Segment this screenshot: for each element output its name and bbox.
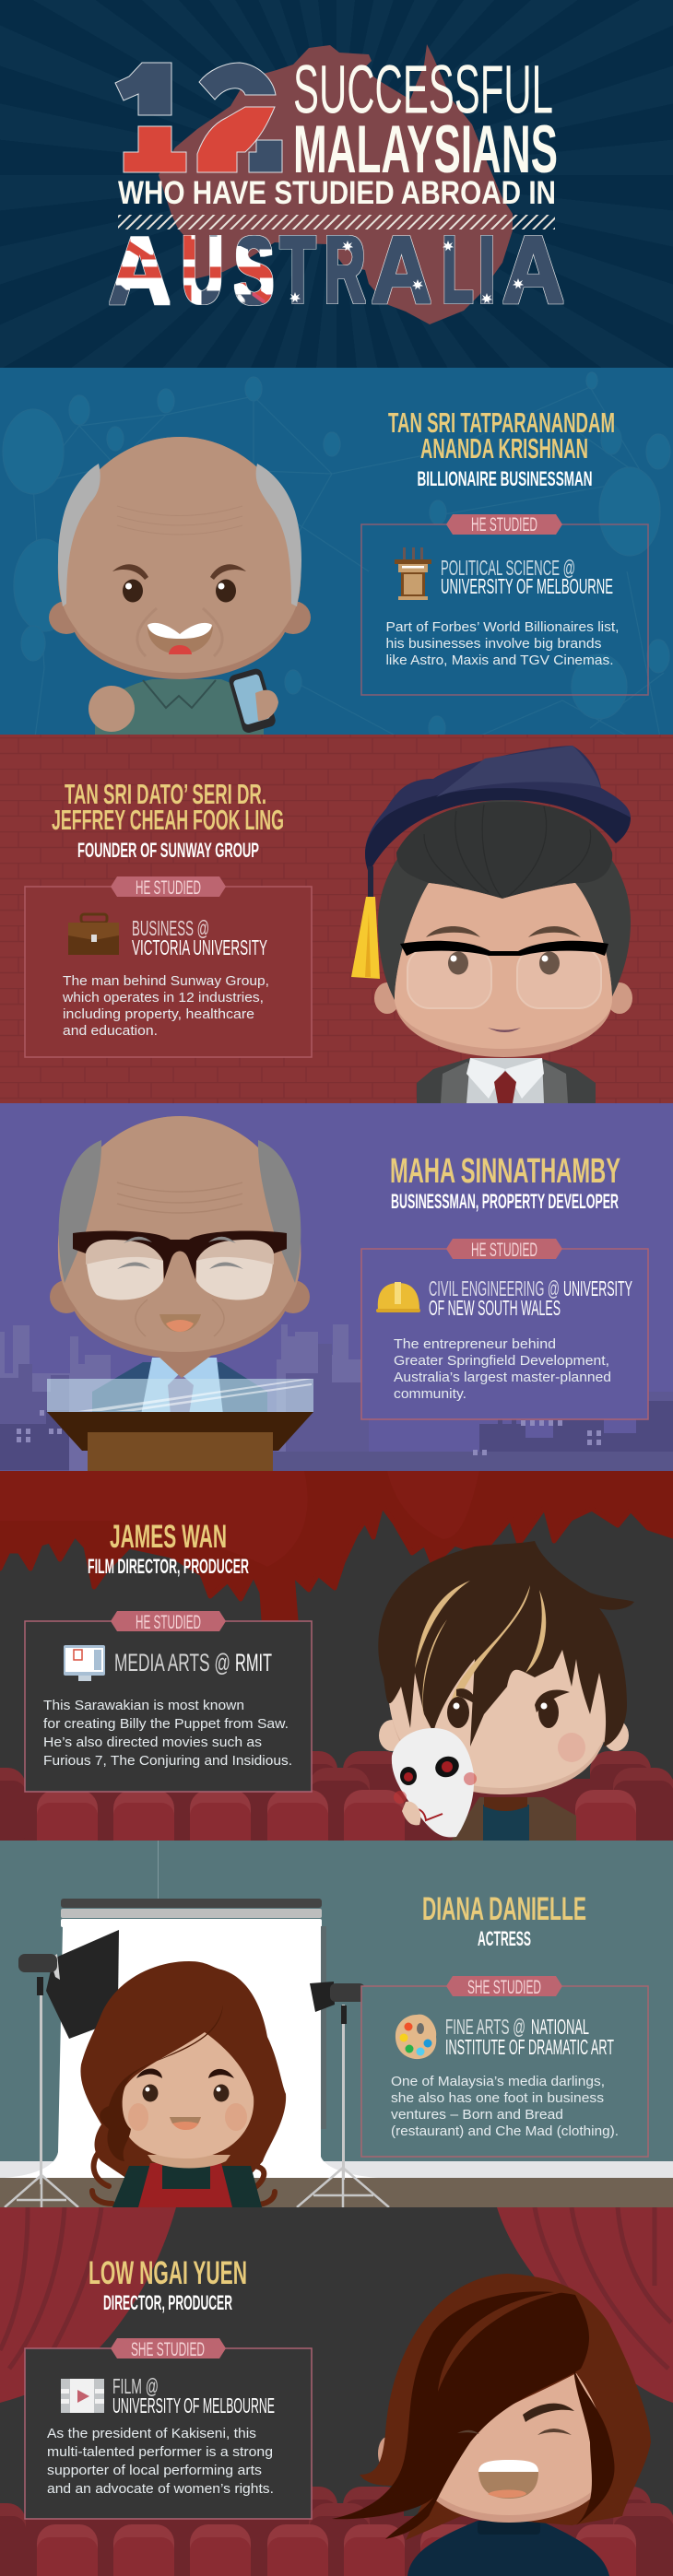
dark fringe [332, 2291, 589, 2539]
collar and buttons [143, 680, 216, 708]
course: POLITICAL SCIENCE @ [441, 556, 575, 580]
study box [361, 514, 648, 695]
stars [289, 241, 524, 303]
description: Australia’s largest master-planned [394, 1370, 611, 1385]
eyes [123, 579, 236, 603]
hanging wire [158, 1841, 159, 1900]
eyebrows [112, 564, 246, 580]
description: community. [394, 1387, 466, 1402]
glasses [400, 941, 608, 1008]
glasses lenses [86, 1240, 274, 1300]
head [118, 2032, 254, 2158]
hatched band [118, 215, 555, 229]
shirt and tie [466, 1058, 544, 1103]
fist [89, 686, 135, 732]
wall skirting [0, 2161, 673, 2178]
inner shirt [483, 1805, 529, 1841]
badge [111, 2338, 226, 2360]
word Australia: U [182, 217, 223, 323]
grey hair [59, 1140, 301, 1283]
fringe strands [424, 805, 591, 899]
shirt [141, 1358, 223, 1415]
floor [0, 2178, 673, 2207]
sweater [407, 2521, 609, 2576]
name [388, 407, 615, 465]
study box [361, 1239, 648, 1419]
word Australia: S [234, 218, 274, 323]
portrait: Krishnan [49, 437, 311, 735]
mouth [148, 623, 213, 654]
fringe highlight [438, 2290, 573, 2392]
title text [118, 52, 558, 211]
description: and an advocate of women’s rights. [47, 2482, 274, 2497]
portrait: Diana [80, 1961, 286, 2207]
course: UNIVERSITY OF MELBOURNE [112, 2394, 275, 2417]
portrait: James Wan [378, 1541, 634, 1841]
course [441, 556, 613, 598]
badge [446, 1976, 562, 1998]
title text: WHO HAVE STUDIED ABROAD IN [118, 175, 556, 211]
badge [446, 1239, 562, 1261]
name: TAN SRI DATO’ SERI DR. [65, 779, 266, 810]
panel: James Wan [0, 1471, 673, 1841]
ears [374, 982, 632, 1014]
word Australia [109, 217, 564, 323]
brows [136, 2068, 234, 2078]
icon: briefcase [68, 914, 119, 955]
neck shadow [148, 2155, 230, 2168]
cityscape [0, 1324, 673, 1475]
course: NATIONAL [531, 2015, 589, 2039]
small spot light [310, 1982, 365, 2180]
suit [92, 1362, 267, 1419]
hat [365, 746, 631, 873]
tripod left [5, 2175, 78, 2207]
eyebrow [523, 2404, 574, 2422]
portrait: Maha [47, 1116, 313, 1471]
hair [80, 1961, 286, 2177]
softbox light [18, 1930, 119, 2184]
mouth [478, 2460, 538, 2499]
course: MEDIA ARTS @ [114, 1649, 230, 1676]
description: for creating Billy the Puppet from Saw. [43, 1717, 289, 1732]
phone [228, 667, 278, 735]
tassel [351, 866, 380, 979]
curls [92, 2147, 275, 2205]
back hair [360, 2274, 651, 2540]
suit [417, 1058, 596, 1103]
portrait: Low Ngai Yuen [332, 2274, 651, 2576]
network background [3, 372, 670, 756]
study box [361, 1976, 648, 2157]
icon: film strip [61, 2379, 104, 2413]
cinema seats [0, 1751, 673, 1867]
description: The man behind Sunway Group, [63, 974, 269, 989]
cheeks [128, 2103, 247, 2131]
description: Greater Springfield Development, [394, 1354, 609, 1369]
description: (restaurant) and Che Mad (clothing). [391, 2124, 619, 2139]
course [445, 2015, 614, 2059]
description: This Sarawakian is most known [43, 1699, 244, 1713]
course: FILM @ [112, 2374, 159, 2398]
name [52, 779, 284, 836]
head [58, 437, 301, 679]
panel: Jeffrey Cheah [0, 735, 673, 1103]
description: supporter of local performing arts [47, 2464, 262, 2478]
badge: HE STUDIED [471, 514, 537, 535]
description [47, 2427, 274, 2497]
badge: HE STUDIED [136, 877, 201, 899]
word Australia: R [325, 217, 365, 323]
side lock [100, 2005, 223, 2161]
badge: SHE STUDIED [131, 2339, 205, 2360]
role: ACTRESS [478, 1927, 531, 1950]
head [58, 1116, 301, 1359]
eyes [142, 2085, 229, 2101]
description: The entrepreneur behind [394, 1337, 556, 1352]
cinema seats [0, 2487, 673, 2576]
description [43, 1699, 292, 1769]
head [419, 2373, 608, 2523]
course: VICTORIA UNIVERSITY [132, 935, 267, 959]
shirt [95, 679, 264, 735]
description: He’s also directed movies such as [43, 1735, 262, 1750]
description: his businesses involve big brands [385, 637, 601, 652]
description: she also has one foot in business [391, 2091, 604, 2106]
badge [446, 514, 562, 535]
mouth [170, 2117, 201, 2130]
hair [378, 1541, 634, 1747]
hair [378, 800, 631, 1000]
header sunburst background [0, 0, 673, 368]
badge: HE STUDIED [471, 1240, 537, 1261]
word Australia: A [372, 217, 431, 323]
icon: lectern [395, 547, 431, 600]
word Australia: L [443, 217, 473, 323]
head [386, 1650, 610, 1794]
description [391, 2075, 619, 2139]
fringe [396, 802, 612, 899]
course: RMIT [235, 1649, 272, 1676]
grey hair [58, 464, 301, 606]
role: FILM DIRECTOR, PRODUCER [88, 1555, 249, 1578]
ears [379, 1720, 629, 1751]
course: OF NEW SOUTH WALES [429, 1296, 561, 1320]
jacket [452, 1797, 576, 1841]
collar [478, 2521, 540, 2535]
study box [25, 2338, 312, 2519]
course: BUSINESS @ [132, 916, 209, 940]
icon: palette [396, 2015, 436, 2059]
icon: monitor [64, 1645, 105, 1681]
name: LOW NGAI YUEN [89, 2255, 247, 2291]
ears [378, 2437, 642, 2470]
ears [49, 601, 311, 634]
description [385, 620, 620, 668]
podium glass [47, 1379, 313, 1412]
word Australia: T [280, 217, 315, 323]
description [394, 1337, 611, 1402]
study box [25, 1611, 312, 1792]
Billy puppet mask [392, 1728, 477, 1837]
backdrop rollers [61, 1899, 326, 2129]
description: ventures – Born and Bread [391, 2108, 563, 2123]
eyes [448, 951, 560, 975]
stage curtains [0, 2207, 673, 2403]
name: JAMES WAN [110, 1519, 227, 1555]
cheek [558, 1733, 585, 1762]
course: FINE ARTS @ [445, 2015, 525, 2039]
icon: hard hat [376, 1282, 420, 1312]
description: As the president of Kakiseni, this [47, 2427, 256, 2441]
tie [168, 1373, 194, 1415]
backdrop [5, 1926, 378, 2178]
description: One of Malaysia’s media darlings, [391, 2075, 605, 2089]
panel: Low Ngai Yuen [0, 2207, 673, 2576]
badge [111, 876, 226, 899]
description: like Astro, Maxis and TGV Cinemas. [385, 653, 614, 668]
blonde streaks [415, 1581, 546, 1723]
mouth [159, 1314, 201, 1332]
course [132, 916, 267, 959]
apron [138, 2163, 232, 2207]
course: CIVIL ENGINEERING @ [429, 1276, 560, 1300]
smile [488, 1028, 521, 1032]
blood drips [0, 1471, 673, 1620]
description: Part of Forbes’ World Billionaires list, [385, 620, 620, 635]
badge: SHE STUDIED [467, 1977, 541, 1998]
panel: Maha Sinnathamby [0, 1103, 673, 1471]
description: including property, healthcare [63, 1007, 254, 1022]
description: Furious 7, The Conjuring and Insidious. [43, 1754, 292, 1769]
word Australia: I [478, 217, 495, 323]
description: and education. [63, 1024, 158, 1039]
neck [157, 1355, 212, 1378]
brows [426, 926, 581, 937]
course [429, 1276, 632, 1320]
word Australia: A [109, 218, 171, 323]
description [62, 974, 269, 1039]
tripod right [297, 2168, 389, 2207]
right dark lock [573, 2369, 615, 2525]
panel: header [109, 44, 564, 324]
top [112, 2166, 262, 2207]
role: DIRECTOR, PRODUCER [103, 2291, 232, 2314]
badge: HE STUDIED [136, 1612, 201, 1633]
head [395, 883, 612, 1057]
course [112, 2374, 275, 2417]
badge [111, 1611, 226, 1633]
panel: Diana Danielle [0, 1841, 673, 2207]
podium [47, 1412, 313, 1471]
study box [25, 876, 312, 1057]
description: which operates in 12 industries, [62, 991, 264, 1006]
word Australia: A [502, 217, 564, 323]
closed eyes [457, 2429, 572, 2435]
description: multi-talented performer is a strong [47, 2445, 273, 2460]
name: JEFFREY CHEAH FOOK LING [52, 805, 284, 836]
panel: Ananda Krishnan [0, 368, 673, 735]
ears [50, 1280, 310, 1313]
map of Australia [159, 44, 513, 324]
wrinkles [117, 1182, 242, 1336]
portrait: Jeffrey Cheah [351, 746, 632, 1103]
role: FOUNDER OF SUNWAY GROUP [77, 839, 259, 862]
eyes [447, 1697, 559, 1728]
wrinkles [117, 506, 242, 656]
brows [456, 1688, 570, 1712]
closed eyes [117, 1237, 243, 1269]
glasses frame [73, 1231, 287, 1279]
number 12 [115, 63, 282, 172]
